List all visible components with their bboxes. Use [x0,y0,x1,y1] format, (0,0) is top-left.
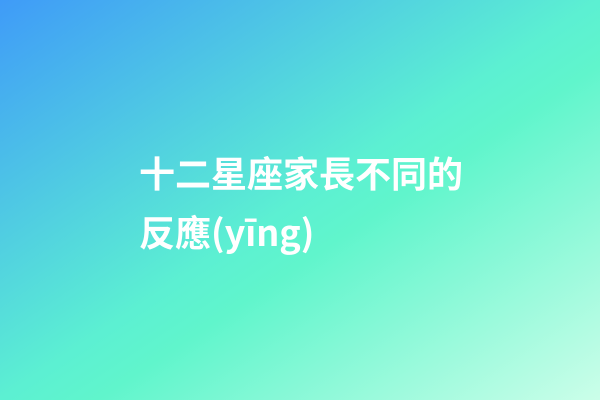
title: 十二星座家長不同的 [139,146,463,198]
title [139,146,463,257]
title: 反應(yīng) [139,205,314,257]
